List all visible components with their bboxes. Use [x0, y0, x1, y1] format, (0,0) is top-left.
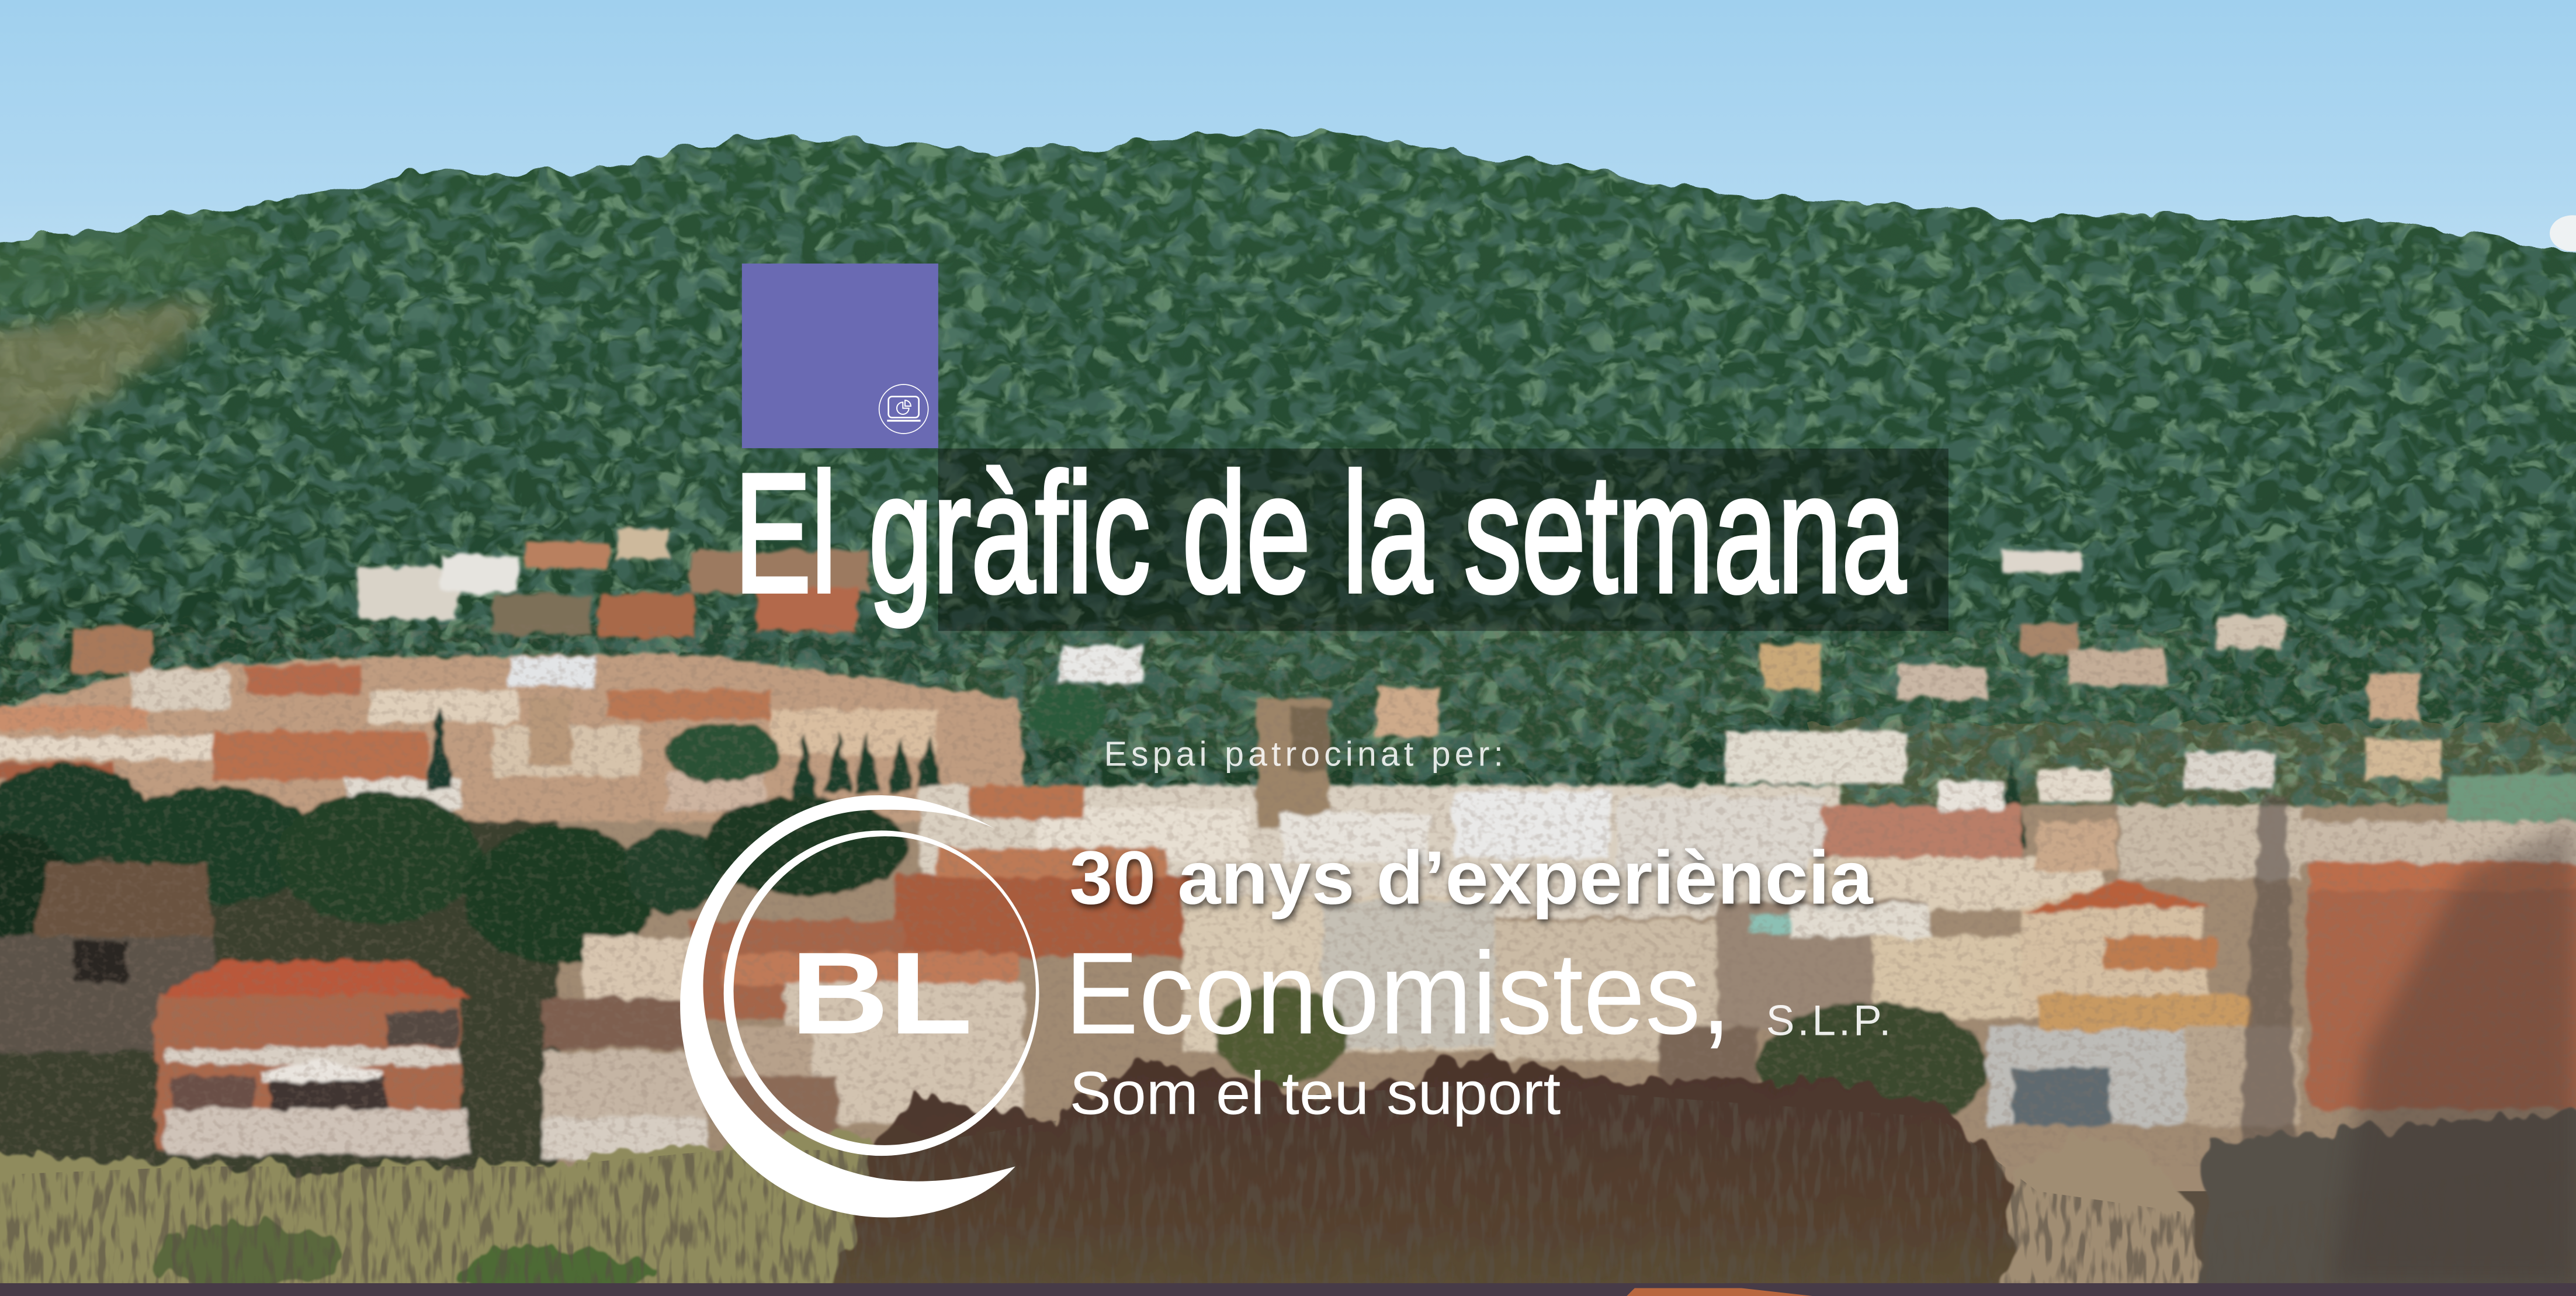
reed texture on vegetation	[0, 1084, 2204, 1283]
company suffix: S.L.P.	[1766, 997, 1891, 1044]
logo outer crescent	[680, 795, 1015, 1218]
tagline: experience: 30 anys d’experiència	[1070, 836, 1874, 920]
grain over town	[0, 625, 2576, 1166]
company name: Economistes,	[1065, 928, 1732, 1059]
small houses near logo	[583, 937, 690, 1002]
central dark trees in front	[1216, 986, 1347, 1084]
purple square with icon	[742, 264, 938, 448]
vegetation base fill	[0, 1191, 2576, 1283]
red-roofed house	[156, 994, 460, 1150]
distant cloud	[2550, 215, 2576, 251]
dark green left tree masses	[0, 764, 148, 862]
scattered hillside houses	[358, 567, 457, 619]
title: El gràfic de la setmana	[734, 439, 1906, 629]
central white roofs	[920, 785, 1840, 917]
title dark band	[938, 449, 1949, 631]
logo letters: BL	[791, 928, 973, 1059]
sponsor label: Espai patrocinat per:	[1104, 734, 1503, 773]
bare tree at right	[2333, 822, 2576, 1283]
upper-left town band	[0, 654, 1027, 822]
sky	[0, 0, 2576, 328]
logo inner ring	[724, 830, 1039, 1156]
right low white building	[1988, 1027, 2251, 1125]
slogan: Som el teu suport	[1070, 1059, 1561, 1127]
hill covered in pines	[0, 115, 2576, 822]
central-front buildings	[895, 874, 1191, 957]
right brick building	[2308, 879, 2576, 1109]
icon: laptop with pie chart	[879, 384, 928, 434]
lattice pylon	[2231, 797, 2300, 1281]
logo: BL Economistes	[680, 795, 1039, 1218]
town and trees	[0, 529, 2576, 1281]
town base tones	[0, 805, 559, 1232]
foreground vegetation	[0, 1055, 2576, 1296]
cypress trees	[425, 706, 453, 789]
left dark house	[33, 862, 214, 937]
road strip	[0, 1283, 2576, 1296]
